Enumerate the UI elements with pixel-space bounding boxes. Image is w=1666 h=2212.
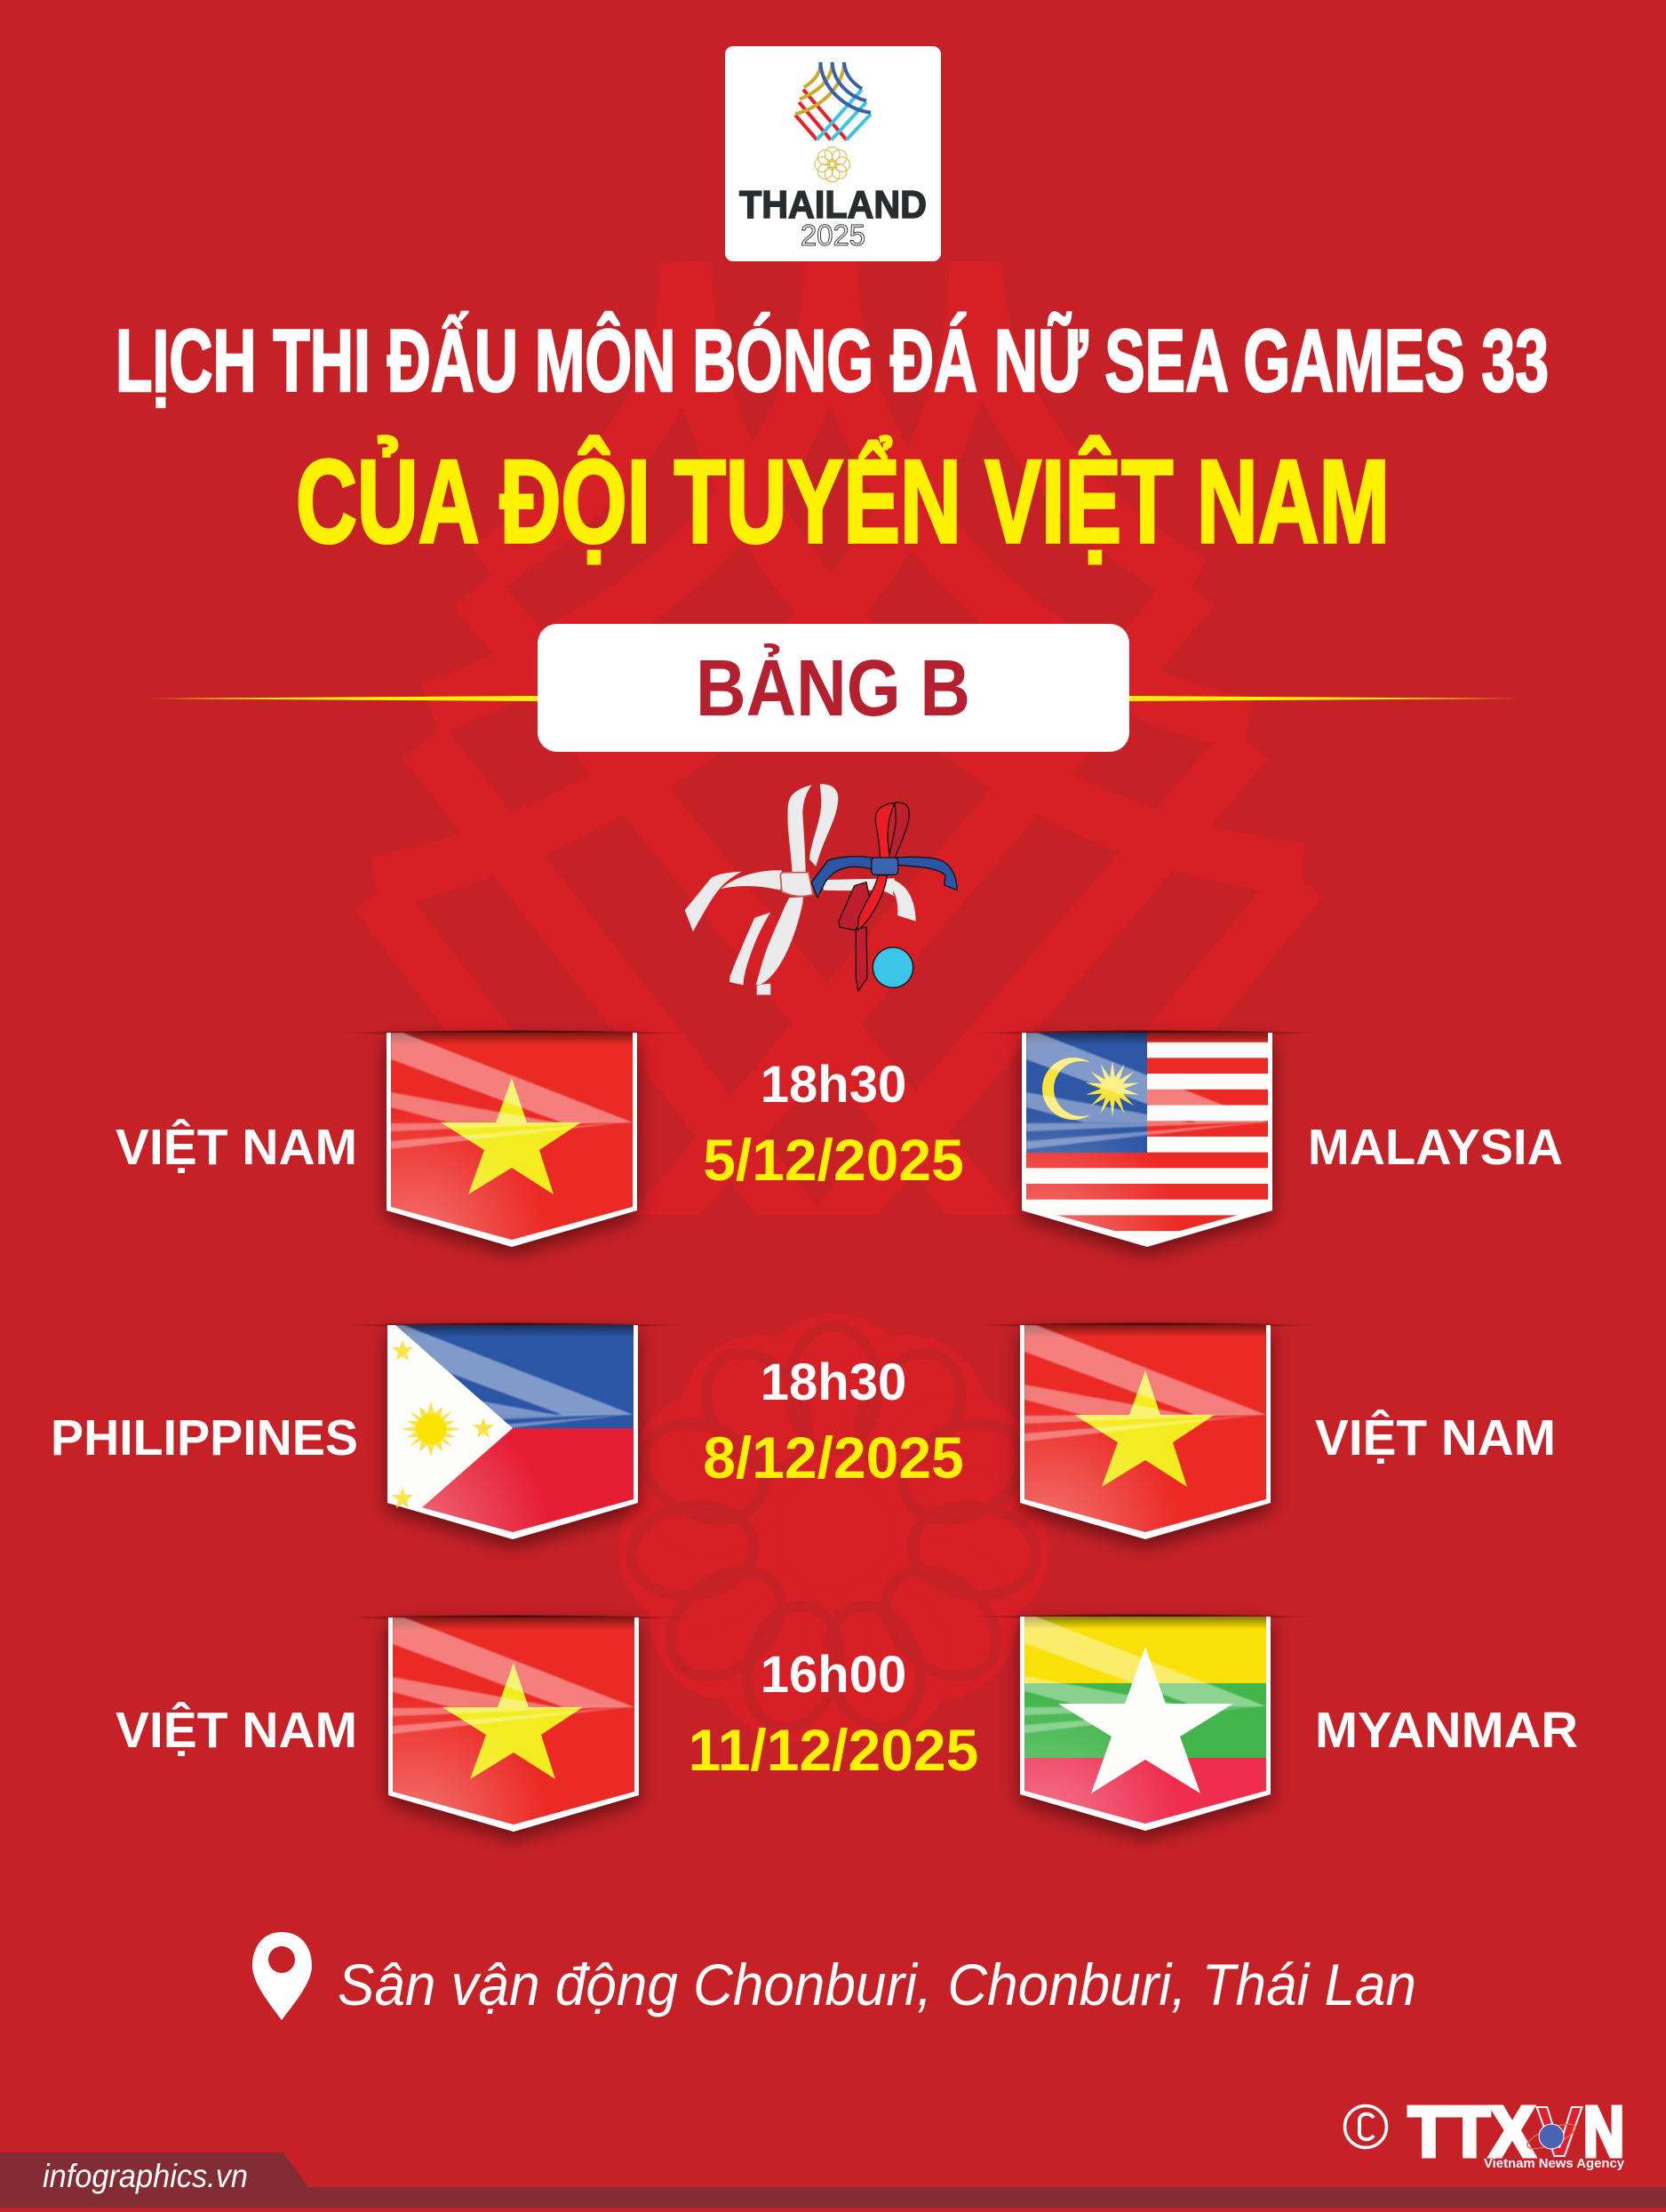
credit: TTXVN — [1345, 2092, 1625, 2171]
kick-off time: 18h30 — [761, 1056, 906, 1114]
match date: 8/12/2025 — [703, 1425, 964, 1490]
venue text: Sân vận động Chonburi, Chonburi, Thái Lan — [338, 1952, 1416, 2017]
agency wordmark: TTX — [1408, 2092, 1534, 2171]
group label: Bảng B — [538, 624, 1129, 752]
icon: ribbons and ball — [685, 784, 957, 994]
flag: Myanmar — [967, 1614, 1324, 1831]
logo: Thailand 2025: 2025 — [801, 219, 865, 252]
match date: 5/12/2025 — [703, 1127, 964, 1193]
kick-off time: 16h00 — [761, 1646, 906, 1704]
team: Philippines: PHILIPPINES — [51, 1409, 358, 1466]
credit: TTXVN: N — [1583, 2092, 1624, 2171]
group label: Bảng B: BẢNG B — [696, 643, 970, 733]
flag: Philippines — [334, 1322, 691, 1539]
logo: Thailand 2025 — [725, 46, 941, 261]
group divider lines — [148, 696, 1519, 701]
background watermark: games emblem — [376, 262, 1303, 1243]
team: Myanmar: MYANMAR — [1315, 1702, 1578, 1759]
flag: Việt Nam — [967, 1322, 1324, 1539]
flag: Malaysia — [969, 1031, 1326, 1247]
footer bar — [0, 2152, 1666, 2208]
match 2 — [51, 1322, 1556, 1539]
agency tagline: Vietnam News Agency — [1484, 2156, 1625, 2171]
match date: 11/12/2025 — [689, 1717, 978, 1783]
footer site label: infographics.vn — [43, 2158, 248, 2194]
credit: TTXVN: V — [1536, 2092, 1582, 2171]
team: Việt Nam: VIỆT NAM — [116, 1118, 357, 1176]
icon: copyright — [1345, 2106, 1386, 2147]
venue — [252, 1932, 1416, 2020]
background watermark: flower — [618, 1314, 1048, 1742]
team: Việt Nam: VIỆT NAM — [1315, 1409, 1556, 1466]
team: Việt Nam: VIỆT NAM — [116, 1701, 357, 1759]
icon: globe — [1525, 2120, 1578, 2153]
match 1 — [116, 1031, 1563, 1247]
logo: Thailand 2025: THAILAND — [739, 183, 927, 227]
flag: Việt Nam — [335, 1616, 692, 1832]
kick-off time: 18h30 — [761, 1354, 906, 1411]
match 3 — [116, 1614, 1578, 1832]
icon: location pin — [252, 1932, 312, 2020]
flag: Việt Nam — [333, 1031, 690, 1247]
team: Malaysia: MALAYSIA — [1308, 1119, 1563, 1176]
